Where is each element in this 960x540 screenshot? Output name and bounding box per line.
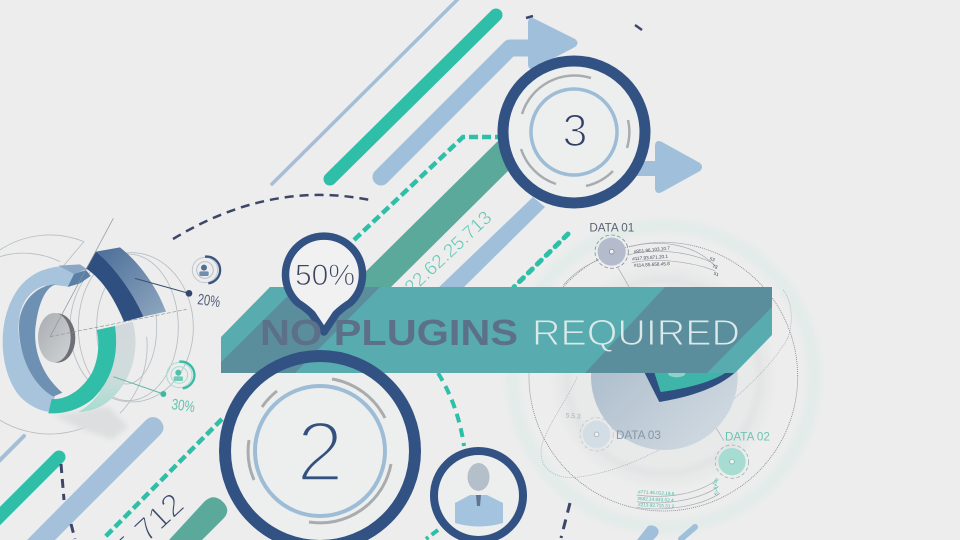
number 2: 2 bbox=[296, 405, 344, 500]
circle 3 bbox=[503, 61, 645, 203]
readout: dark data lines: #117.93.871.20.1 bbox=[632, 254, 669, 261]
line: top thin blue bbox=[272, 0, 458, 184]
inner pale rings bbox=[553, 267, 773, 487]
chart: left 3D ring diagram bbox=[0, 218, 222, 439]
circle 2 interior bbox=[225, 356, 415, 540]
banner shade: right bbox=[585, 287, 772, 373]
bar: bottom-left teal bbox=[0, 457, 59, 522]
arrow: upper blue bbox=[381, 18, 578, 177]
readout: green data lines: 106 bbox=[712, 477, 720, 486]
number 3: 3 bbox=[562, 105, 588, 156]
shadow bbox=[53, 407, 128, 439]
label: 5.5.3: 5.5.3 bbox=[565, 412, 581, 421]
ring: teal side fade bbox=[78, 322, 136, 412]
dotted orbit bbox=[529, 242, 798, 511]
dashed connector: green to person bbox=[438, 373, 464, 446]
readout: dark data lines: #851.96.103.10.7 bbox=[634, 246, 671, 254]
chart: right radial data diagram bbox=[513, 222, 814, 527]
dashed arc: navy bbox=[173, 195, 370, 239]
circle 2 bbox=[225, 356, 415, 540]
bar: bottom-left blue bbox=[27, 417, 164, 540]
ring: inner blue bbox=[531, 89, 617, 175]
label: data 01: DATA 01 bbox=[589, 222, 634, 235]
headline light: REQUIRED bbox=[532, 312, 740, 353]
label: data 03: DATA 03 bbox=[616, 429, 661, 442]
readout: green data lines: #771.46.012.19.5. bbox=[638, 489, 676, 496]
icon: person 30% bbox=[167, 362, 194, 388]
pointer: 20% bbox=[135, 278, 192, 297]
ring: navy bbox=[225, 356, 415, 540]
pin: 50% bbox=[286, 236, 362, 332]
dashed connector: green to circle 3 bbox=[354, 137, 500, 240]
headline bbox=[260, 312, 740, 353]
pale outer ring bbox=[513, 226, 814, 527]
ring: inner blue bbox=[255, 386, 385, 516]
bar: top teal bbox=[330, 15, 496, 179]
arrow: right blue bbox=[630, 141, 702, 193]
guide lines bbox=[50, 218, 187, 337]
readout: green data lines bbox=[637, 477, 720, 509]
readout: dark data lines: 51 bbox=[713, 271, 720, 277]
dashed connector: green below person bbox=[426, 530, 438, 539]
icon: person 20% bbox=[192, 257, 220, 283]
pin shape bbox=[286, 236, 362, 332]
thin guide circles bbox=[0, 235, 193, 434]
ring: top connector bbox=[58, 264, 91, 287]
dashed connector: green right bbox=[514, 234, 568, 287]
headline bold: NO PLUGINS bbox=[260, 312, 518, 353]
central disc bbox=[38, 313, 75, 363]
bar: dark green to circle 3 bbox=[347, 140, 509, 290]
circle: person bbox=[434, 451, 523, 540]
bar: bottom dark green bbox=[169, 497, 227, 540]
readout: dark data lines: #114.85.658.45.8 bbox=[634, 261, 670, 268]
3D centre wedge bbox=[644, 369, 736, 402]
readout: green data lines: 97 bbox=[713, 483, 720, 490]
ticks: navy bbox=[526, 16, 642, 30]
label: 30%: 30% bbox=[170, 396, 196, 416]
ring: darker inner blue bbox=[19, 284, 62, 397]
ring: navy bbox=[503, 61, 645, 203]
thin curves bbox=[541, 243, 791, 509]
dashed connector: green to circle 2 bbox=[103, 419, 222, 539]
dashed line: navy vertical bbox=[61, 464, 75, 539]
segment: teal bbox=[48, 326, 116, 413]
banner bbox=[221, 287, 772, 373]
arcs: gray bbox=[248, 379, 391, 523]
readout: dark data lines bbox=[632, 246, 720, 277]
pointer: 30% bbox=[113, 377, 166, 397]
node: data 01 bbox=[595, 235, 628, 268]
node: data 03 bbox=[580, 418, 613, 451]
bar: bottom blue stub bbox=[637, 525, 659, 540]
readout: green data lines: #582.14.843.02.4. bbox=[637, 496, 675, 503]
segment: navy bbox=[86, 247, 166, 322]
central sphere bbox=[591, 303, 738, 450]
readout: dark data lines: 53 bbox=[709, 256, 716, 263]
dashed line: navy bottom bbox=[561, 503, 570, 538]
pin value: 50% bbox=[295, 259, 355, 292]
label: data 02: DATA 02 bbox=[725, 431, 770, 444]
node: data 02 bbox=[715, 445, 749, 478]
banner shade: left bbox=[221, 287, 380, 373]
ring: navy bbox=[434, 451, 523, 540]
banner shape bbox=[221, 287, 772, 373]
bar: blue below circle 3 bbox=[436, 197, 545, 290]
line: bottom blue stub thin bbox=[681, 527, 695, 539]
readout: green data lines: 67 bbox=[713, 489, 720, 496]
line: bottom-left thin blue bbox=[0, 436, 24, 462]
icon: person bbox=[455, 463, 503, 526]
arcs: gray bbox=[521, 75, 629, 186]
readout: dark data lines: 73 bbox=[712, 264, 719, 270]
readout: green data lines: #213.92.715.31.2. bbox=[638, 502, 676, 509]
label: rotated address 713: 22.62.25.713 bbox=[401, 207, 496, 298]
ring: light blue face bbox=[3, 266, 83, 412]
label: 20%: 20% bbox=[196, 291, 222, 311]
